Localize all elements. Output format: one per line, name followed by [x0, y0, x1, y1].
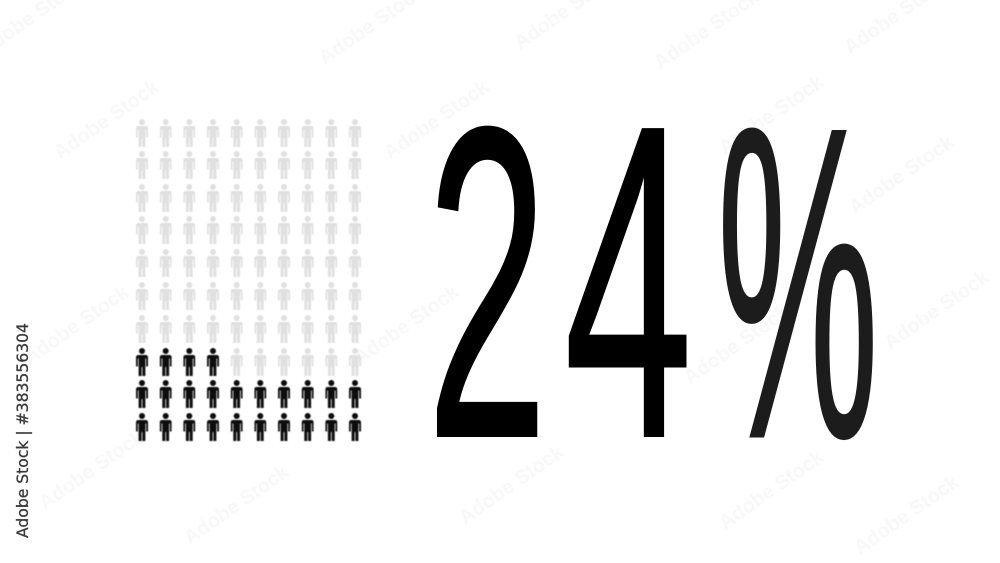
watermark pattern: Adobe Stock — [20, 281, 134, 369]
grey people — [136, 119, 361, 376]
large percentage figure — [426, 33, 879, 531]
digit 4: 4 — [564, 33, 693, 531]
watermark pattern: Adobe Stock — [180, 461, 294, 549]
watermark pattern: Adobe Stock — [850, 471, 964, 559]
watermark pattern: Adobe Stock — [715, 71, 829, 159]
watermark pattern: Adobe Stock — [845, 131, 959, 219]
watermark pattern: Adobe Stock — [880, 266, 994, 354]
watermark pattern: Adobe Stock — [350, 281, 464, 369]
percent sign: % — [717, 35, 879, 531]
watermark pattern: Adobe Stock — [35, 426, 149, 514]
people chart: 24 of 100 highlighted — [136, 119, 361, 441]
watermark pattern: Adobe Stock — [50, 76, 164, 164]
watermark pattern: Adobe Stock — [680, 301, 794, 389]
black people — [136, 348, 361, 441]
watermark pattern: Adobe Stock — [380, 76, 494, 164]
stock credit: Adobe Stock | #383556304 — [14, 323, 32, 538]
digit 2: 2 — [426, 35, 548, 530]
watermark pattern: Adobe Stock — [715, 446, 829, 534]
watermark pattern: Adobe Stock — [455, 441, 569, 529]
